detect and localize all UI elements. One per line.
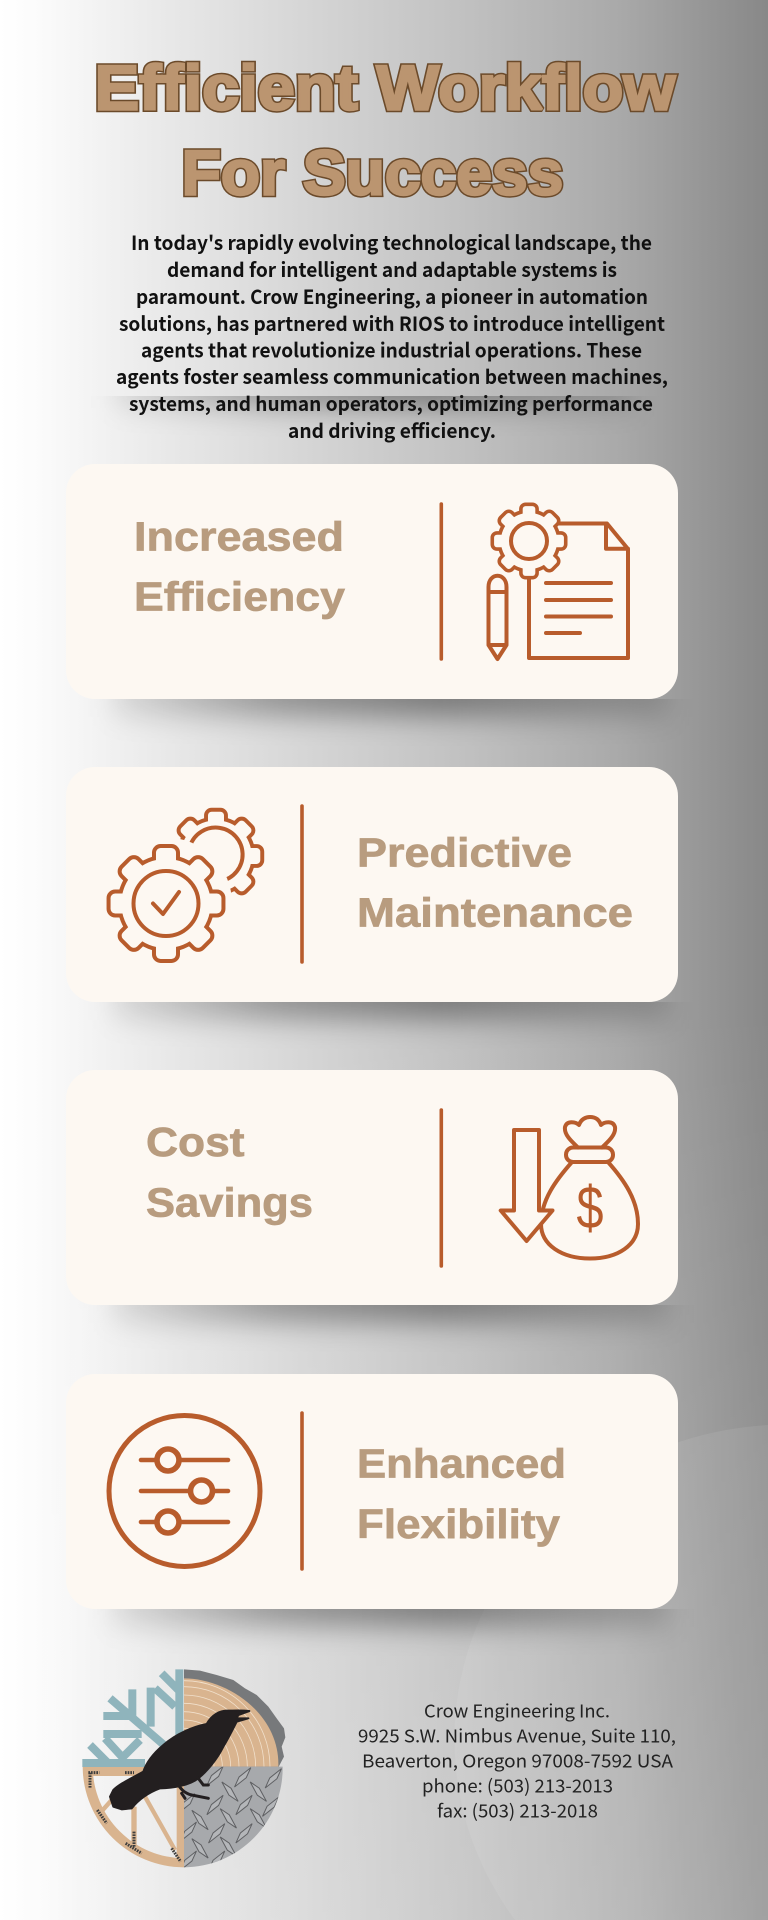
icon: sliders in a circle: [109, 1416, 260, 1566]
footer contact text: Crow Engineering Inc.: [424, 1698, 610, 1724]
intro paragraph: demand for intelligent and adaptable systems is: [167, 254, 617, 283]
heading: enhanced flexibility: Enhanced: [357, 1440, 566, 1486]
panel: enhanced flexibility: [66, 1374, 678, 1609]
heading: predictive maintenance: Maintenance: [357, 890, 633, 936]
panel: increased efficiency: [66, 464, 678, 699]
heading: enhanced flexibility: Flexibility: [357, 1501, 560, 1547]
footer contact text: phone: (503) 213-2013: [422, 1773, 613, 1799]
panel: cost savings: [66, 1070, 678, 1305]
title: [96, 60, 679, 198]
intro paragraph: agents foster seamless communication between machines,: [116, 361, 668, 390]
heading: cost savings: Cost: [146, 1119, 245, 1165]
icon: gear and document with pencil: [488, 506, 628, 659]
footer contact text: fax: (503) 213-2018: [437, 1798, 598, 1824]
heading: increased efficiency: Increased: [134, 514, 344, 560]
footer contact text: [358, 1698, 676, 1824]
panel: predictive maintenance: [66, 767, 678, 1002]
logo: crow engineering: [82, 1669, 286, 1868]
intro paragraph: and driving efficiency.: [288, 415, 496, 444]
heading: enhanced flexibility: [357, 1440, 566, 1547]
intro paragraph: agents that revolutionize industrial operations. These: [141, 334, 642, 364]
icon: down arrow and money bag: [501, 1117, 638, 1258]
icon: down arrow and money bag: $: [576, 1174, 604, 1241]
footer contact text: 9925 S.W. Nimbus Avenue, Suite 110,: [358, 1723, 676, 1749]
footer contact text: Beaverton, Oregon 97008-7592 USA: [362, 1748, 673, 1774]
heading: cost savings: [146, 1119, 313, 1226]
heading: predictive maintenance: Predictive: [357, 830, 572, 876]
intro paragraph: [116, 227, 668, 444]
icon: gears with check mark: [100, 812, 260, 970]
heading: cost savings: Savings: [146, 1180, 313, 1226]
heading: increased efficiency: Efficiency: [134, 574, 345, 620]
intro paragraph: solutions, has partnered with RIOS to introduce intelligent: [119, 308, 665, 337]
heading: increased efficiency: [134, 514, 345, 620]
intro paragraph: paramount. Crow Engineering, a pioneer in automation: [136, 281, 648, 310]
intro paragraph: systems, and human operators, optimizing performance: [129, 388, 653, 417]
heading: predictive maintenance: [357, 830, 633, 936]
intro paragraph: In today's rapidly evolving technological landscape, the: [131, 227, 652, 256]
